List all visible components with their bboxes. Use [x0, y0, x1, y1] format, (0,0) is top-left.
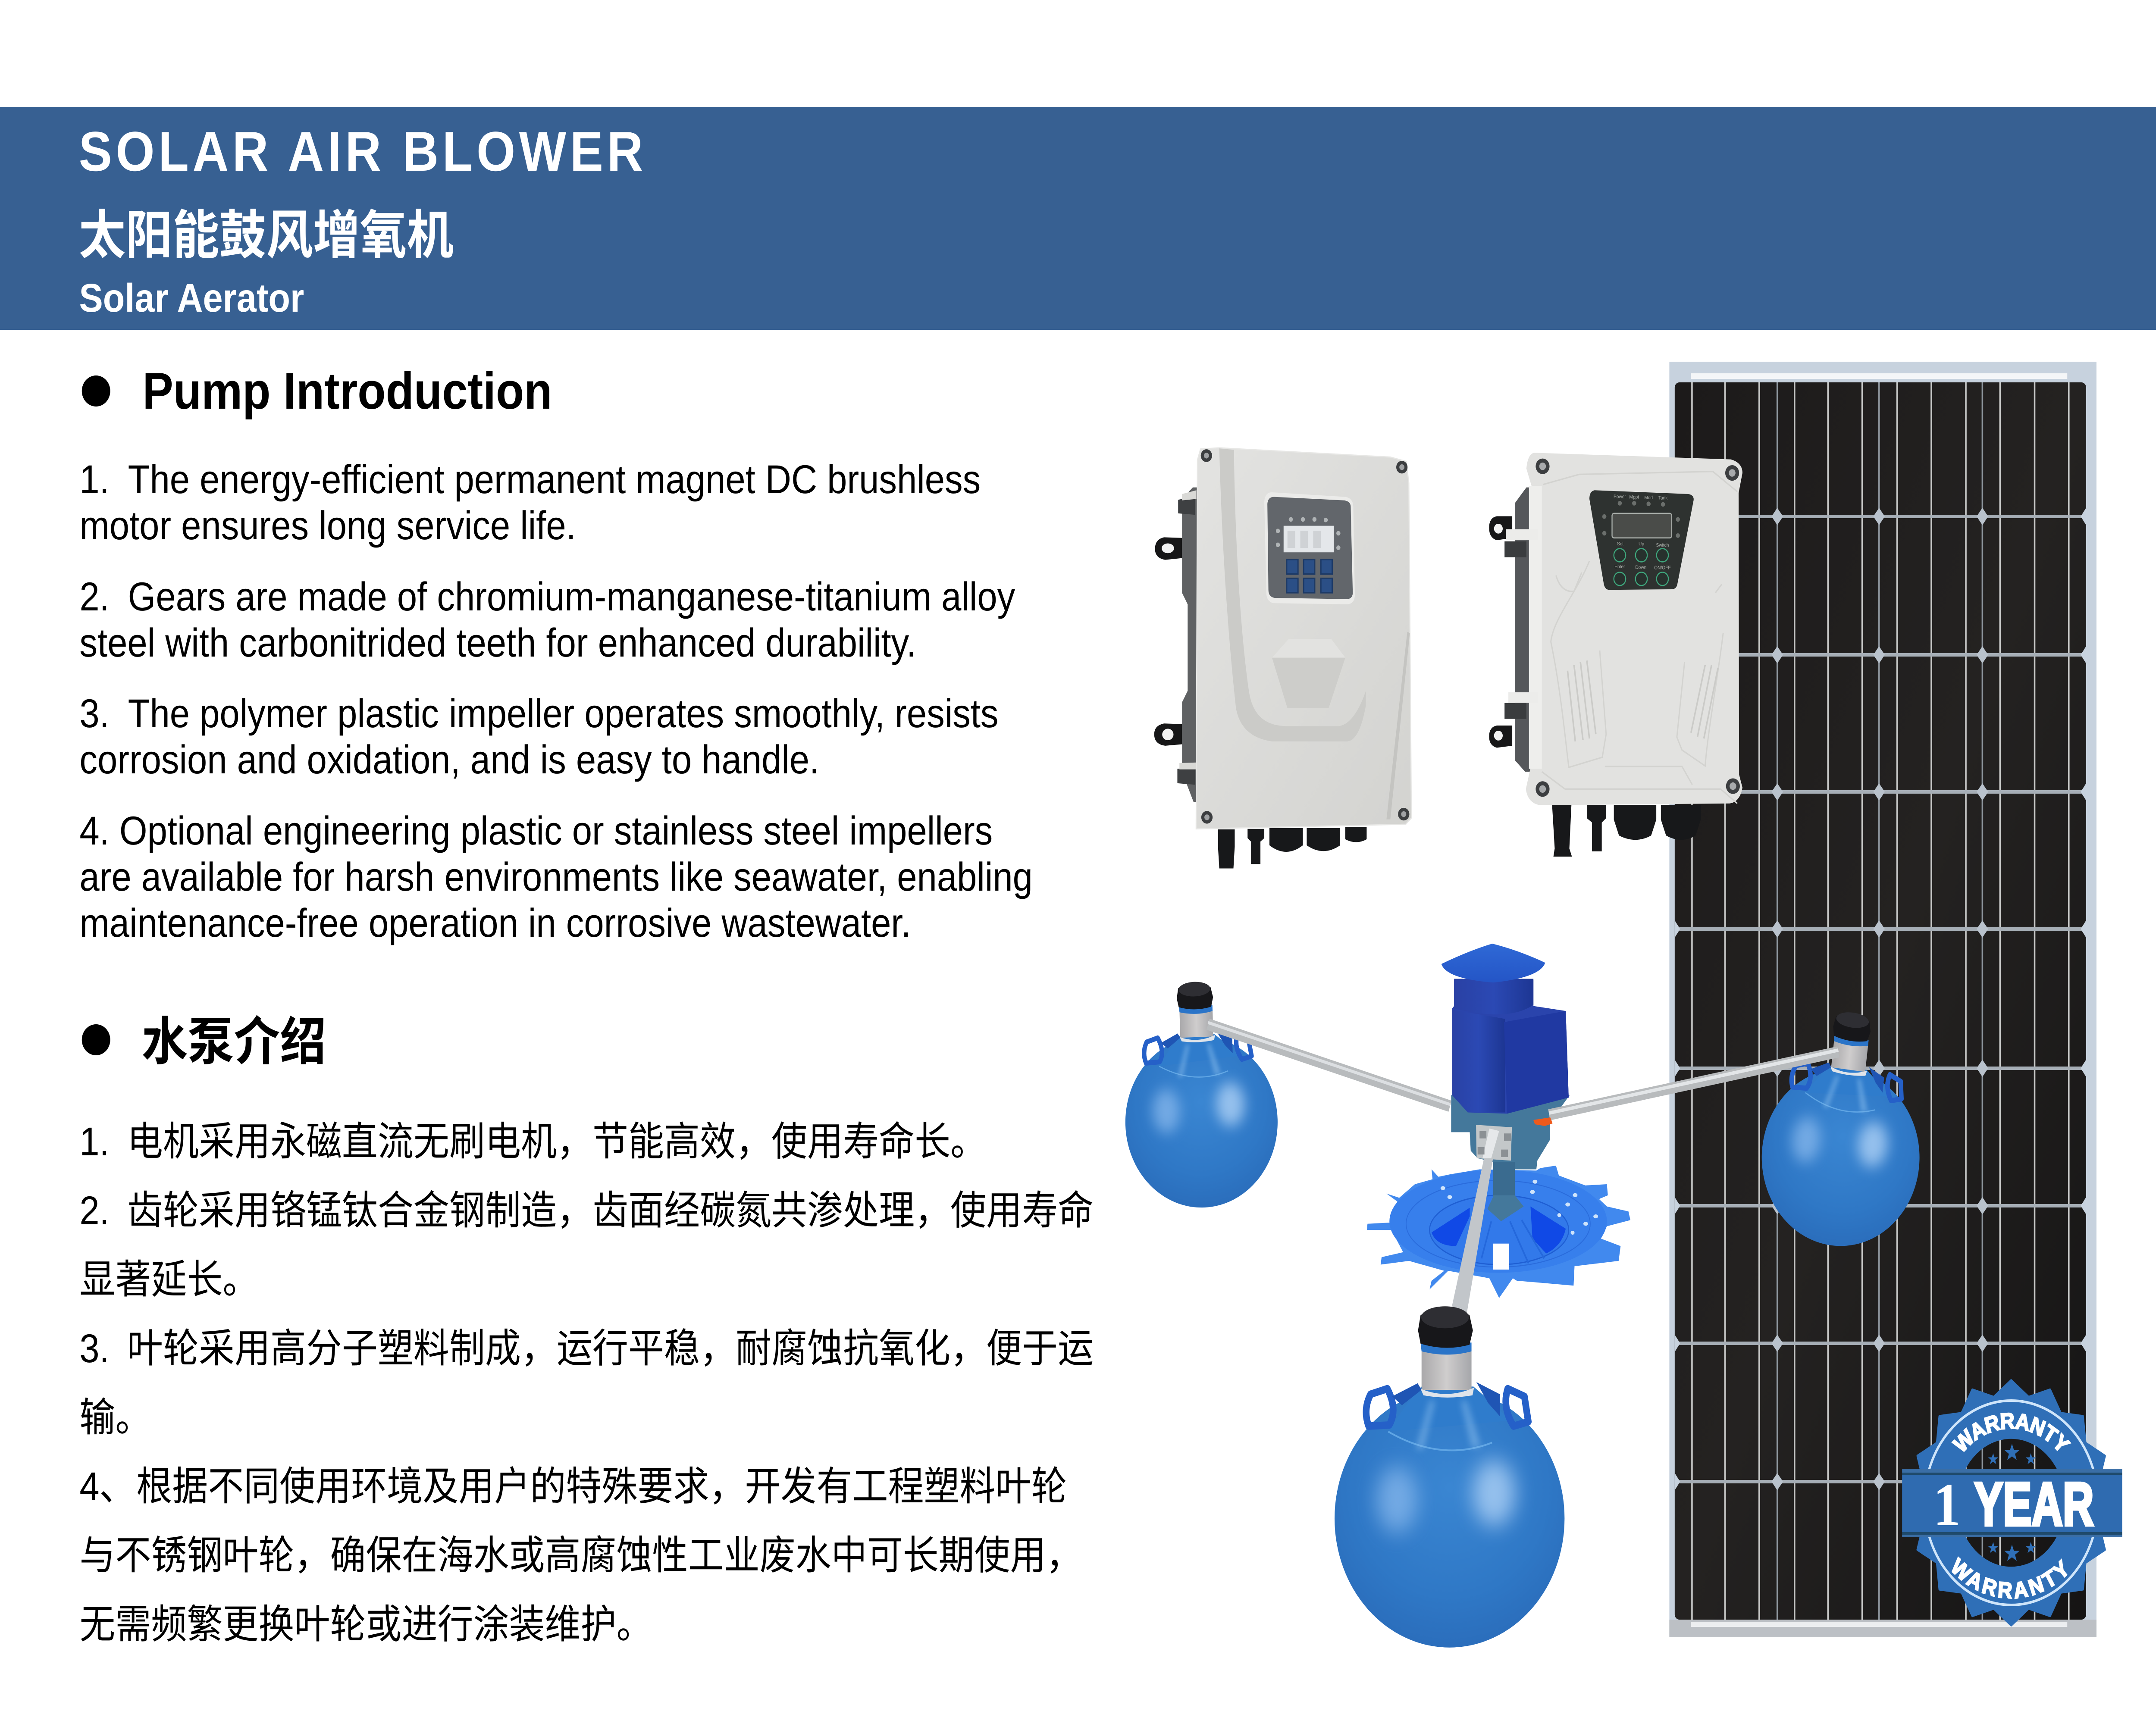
float bottom [1335, 1306, 1564, 1648]
panel labels: ON/OFF [1654, 565, 1671, 570]
screws [1201, 449, 1409, 824]
subtitle: Solar Aerator: Solar Aerator [79, 275, 304, 320]
mounting plate and lugs [1154, 488, 1199, 802]
screws [1536, 459, 1740, 797]
panel labels: Mod [1644, 495, 1653, 500]
English point 3: 3. [79, 691, 110, 736]
mounting bracket [1476, 1125, 1512, 1160]
title: Solar Air Blower: SOLAR AIR BLOWER [79, 120, 643, 183]
bullet [82, 375, 110, 407]
Chinese point 2: 2. [79, 1188, 110, 1233]
English point 3: corrosion and oxidation, and is easy to handle. [79, 737, 819, 782]
arc text top: WARRANTY [1949, 1408, 2073, 1458]
Chinese point 4: 无需频繁更换叶轮或进行涂装维护。 [79, 1602, 652, 1647]
panel labels: Tank [1658, 495, 1668, 500]
arc text bottom: WARRANTY [1946, 1554, 2076, 1604]
mounting plate and lugs [1489, 488, 1532, 772]
heading: 水泵介绍 [142, 1013, 326, 1071]
Chinese point 3: 叶轮采用高分子塑料制成，运行平稳，耐腐蚀抗氧化，便于运 [127, 1326, 1094, 1371]
Chinese point 3: 输。 [79, 1395, 151, 1440]
English point 4: are available for harsh environments like seawater, enabling [79, 854, 1033, 899]
English point 2: Gears are made of chromium-manganese-titanium alloy [128, 574, 1015, 619]
connectors [1552, 805, 1701, 857]
connectors [1218, 827, 1366, 868]
English point 2: 2. [79, 574, 110, 619]
1 YEAR: YEAR [1974, 1470, 2094, 1539]
scalloped seal [1910, 1380, 2112, 1625]
motor and gearbox [1442, 944, 1570, 1221]
section: 水泵介绍 [79, 1013, 1094, 1647]
English point 4: 4. Optional engineering plastic or stainless steel impellers [79, 808, 993, 853]
English point 3: The polymer plastic impeller operates smoothly, resists [128, 691, 999, 736]
panel labels: Set [1617, 541, 1623, 547]
panel labels: Switch [1656, 542, 1669, 548]
bullet [82, 1024, 110, 1055]
heading: Pump Introduction [142, 362, 552, 420]
title: Chinese product name: 太阳能鼓风增氧机 [79, 206, 454, 265]
Chinese point 4: 4、 [79, 1464, 135, 1509]
panel labels: Down [1635, 564, 1646, 570]
Chinese point 1: 1. [79, 1119, 110, 1164]
ring line [1924, 1401, 2098, 1605]
front band [1219, 448, 1366, 741]
inverter right [1489, 453, 1742, 857]
1 YEAR: 1 [1933, 1470, 1961, 1539]
panel labels: Mppt [1630, 494, 1639, 500]
float right [1753, 1002, 1935, 1256]
Chinese point 4: 根据不同使用环境及用户的特殊要求，开发有工程塑料叶轮 [136, 1464, 1067, 1509]
warranty badge [1902, 1380, 2122, 1625]
Chinese point 2: 显著延长。 [79, 1257, 258, 1302]
panel labels: Enter [1614, 564, 1625, 569]
control panel [1264, 492, 1355, 604]
English point 1: motor ensures long service life. [79, 503, 576, 548]
arm rods [1208, 1023, 1838, 1115]
stars [1988, 1444, 2036, 1561]
English point 1: 1. [79, 457, 110, 502]
section: Pump Introduction [79, 362, 1033, 945]
panel labels [1614, 494, 1671, 570]
Chinese point 2: 齿轮采用铬锰钛合金钢制造，齿面经碳氮共渗处理，使用寿命 [127, 1188, 1094, 1233]
panel labels: Up [1639, 541, 1644, 547]
solar panel [1669, 362, 2096, 1637]
inverter left [1154, 448, 1411, 868]
float left [1121, 979, 1280, 1211]
vent ribs [1567, 660, 1718, 741]
panel labels: Power [1614, 494, 1626, 499]
enclosure [1196, 448, 1411, 829]
English point 1: The energy-efficient permanent magnet DC brushless [128, 457, 981, 502]
English point 4: maintenance-free operation in corrosive wastewater. [79, 900, 911, 945]
Chinese point 3: 3. [79, 1326, 110, 1371]
enclosure [1526, 453, 1742, 805]
impeller [1367, 1166, 1630, 1298]
lower arm rod [1452, 1138, 1496, 1313]
control panel [1589, 490, 1694, 590]
English point 2: steel with carbonitrided teeth for enhanced durability. [79, 620, 916, 665]
header band [0, 107, 2156, 330]
aerator assembly [1121, 944, 1935, 1648]
raised face [1542, 472, 1737, 804]
ribbon [1902, 1469, 2122, 1537]
safety knob [1533, 1117, 1553, 1126]
Chinese point 4: 与不锈钢叶轮，确保在海水或高腐蚀性工业废水中可长期使用， [79, 1533, 1082, 1578]
Chinese point 1: 电机采用永磁直流无刷电机，节能高效，使用寿命长。 [127, 1119, 986, 1164]
